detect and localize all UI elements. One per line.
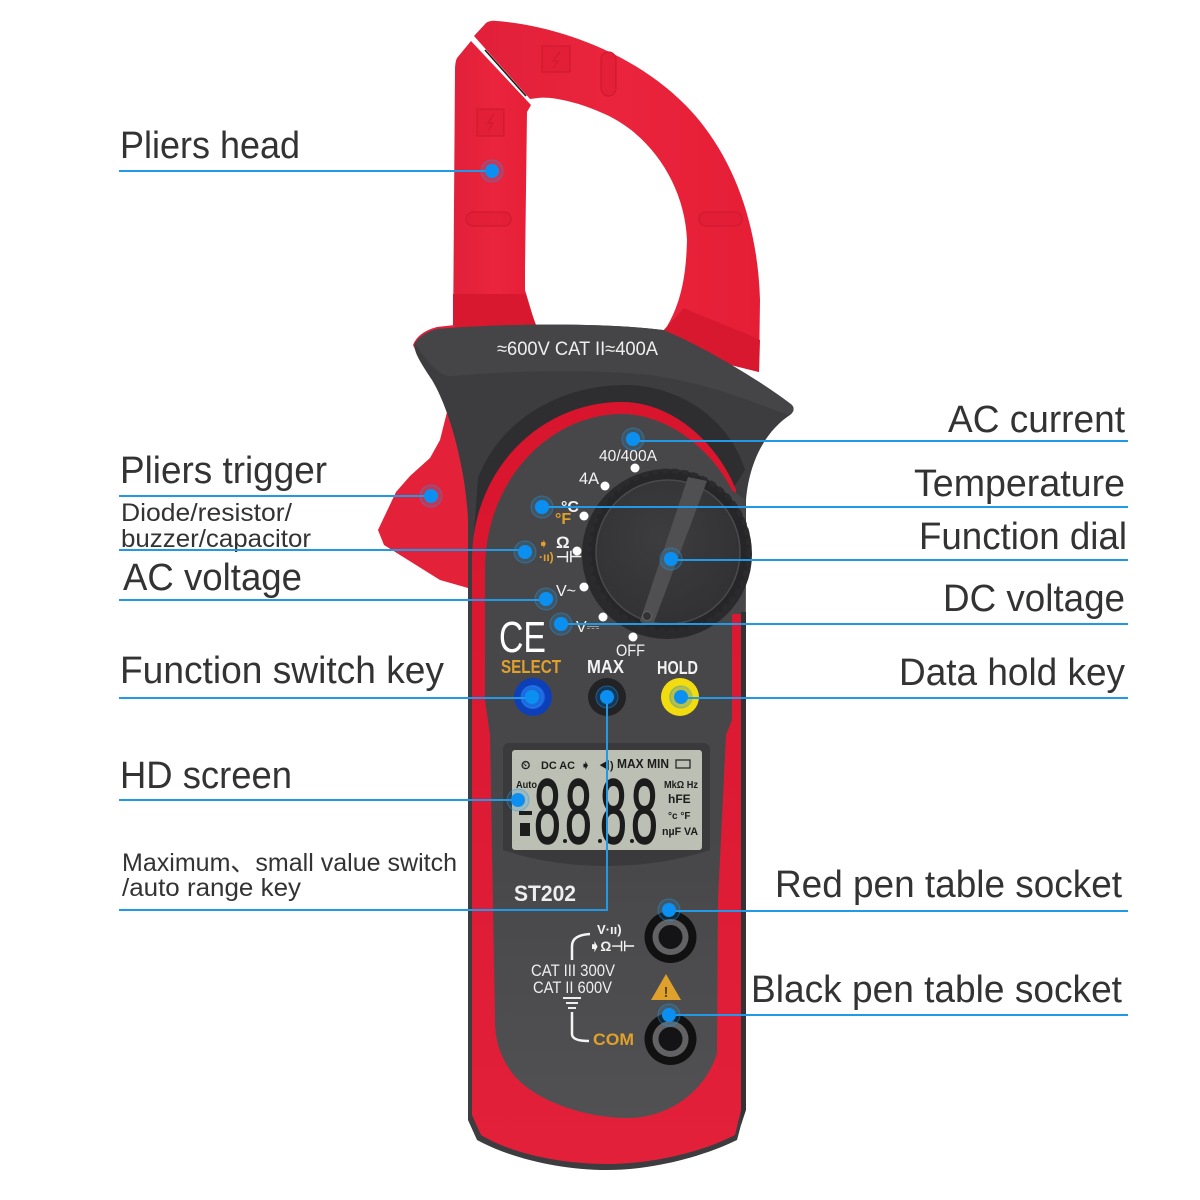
LCD units: MkΩ Hz bbox=[664, 780, 698, 791]
LCD minus sign bbox=[519, 811, 532, 815]
dial scale labels: OFF bbox=[616, 641, 645, 660]
pliers trigger bbox=[378, 408, 480, 588]
LCD units: °c °F bbox=[668, 811, 690, 822]
CE mark: CE bbox=[499, 613, 546, 662]
black pen socket bbox=[644, 1013, 696, 1065]
LCD decimal points bbox=[563, 839, 634, 843]
socket legend bbox=[531, 922, 635, 1049]
red sliver behind collar bbox=[413, 325, 455, 360]
rating text: ≈600V CAT II≈400A bbox=[497, 339, 658, 360]
right side dark edge bbox=[741, 612, 746, 1125]
hold button bbox=[661, 678, 699, 716]
dial pointer bbox=[640, 477, 707, 625]
dial scale labels: ➧ bbox=[538, 536, 549, 551]
callout: Diode/resistor/buzzer/capacitor: Diode/resistor/ bbox=[121, 499, 292, 527]
red frame bbox=[472, 402, 741, 1164]
LCD screen: MAX MIN bbox=[617, 756, 669, 771]
LCD digits: 8 bbox=[630, 763, 659, 872]
callout: Diode/resistor/buzzer/capacitor bbox=[119, 499, 536, 563]
LCD digits: 8 bbox=[564, 763, 593, 872]
jaw gap bbox=[485, 50, 526, 96]
callout: Pliers trigger: Pliers trigger bbox=[120, 450, 327, 492]
LCD bezel bbox=[503, 743, 710, 866]
callout: Pliers trigger bbox=[119, 450, 442, 507]
legend function symbols: ➧Ω⊣⊢ bbox=[589, 938, 635, 954]
max button bbox=[588, 678, 626, 716]
callout: AC voltage bbox=[119, 557, 557, 610]
callout: AC current: AC current bbox=[948, 399, 1125, 441]
callout: Temperature: Temperature bbox=[914, 463, 1125, 505]
callout: Diode/resistor/buzzer/capacitor: buzzer/capacitor bbox=[121, 525, 311, 553]
CAT III rating: CAT III 300V bbox=[531, 961, 616, 980]
jaw base shading right bbox=[650, 308, 760, 372]
dial scale labels: ·ıı) bbox=[539, 550, 554, 564]
callout: Pliers head bbox=[119, 125, 503, 182]
LCD screen: DC AC bbox=[541, 760, 575, 772]
dial scale labels: 40/400A bbox=[599, 448, 657, 465]
callout: Function dial bbox=[660, 516, 1128, 570]
dial scale labels: 4A bbox=[579, 469, 600, 488]
LCD status row: ⏲ bbox=[521, 758, 530, 772]
dial scale labels: Ω bbox=[556, 533, 570, 552]
battery icon bbox=[676, 760, 690, 768]
model name: ST202 bbox=[514, 881, 576, 906]
button labels bbox=[501, 657, 698, 678]
jaw base shading bbox=[453, 294, 540, 335]
callout: Black pen table socket: Black pen table socket bbox=[751, 969, 1122, 1011]
body outer shell bbox=[414, 325, 794, 1170]
LCD digits bbox=[533, 763, 659, 872]
pliers head: upper jaw bbox=[474, 21, 760, 372]
callout: HD screen: HD screen bbox=[120, 755, 292, 797]
callout: AC current bbox=[622, 399, 1128, 450]
LCD screen: ➧ bbox=[581, 760, 590, 772]
callout: Maximum, small value switch / auto range key: Maximum、small value switch bbox=[122, 849, 457, 877]
dial scale labels: V⎓ bbox=[576, 619, 600, 636]
clamp meter device bbox=[378, 21, 794, 1170]
callout: Temperature bbox=[531, 463, 1128, 518]
function dial bbox=[582, 469, 752, 639]
callout: Maximum, small value switch / auto range key: /auto range key bbox=[122, 874, 302, 902]
legend bracket bottom bbox=[572, 1012, 589, 1041]
callout: AC voltage: AC voltage bbox=[123, 557, 302, 599]
legend symbols: V·ıı) bbox=[597, 922, 622, 937]
pointer pivot bbox=[642, 612, 652, 620]
callout: Red pen table socket: Red pen table socket bbox=[775, 864, 1122, 906]
legend bracket top bbox=[572, 934, 590, 960]
callout: DC voltage bbox=[550, 578, 1128, 635]
dial knurl bbox=[589, 471, 749, 631]
dial face bbox=[596, 480, 740, 624]
callout: Function dial: Function dial bbox=[919, 516, 1127, 558]
select button bbox=[514, 678, 552, 716]
callout: Function switch key: Function switch key bbox=[120, 650, 444, 692]
LCD screen: ◀) bbox=[599, 759, 614, 772]
LCD screen bbox=[512, 750, 702, 872]
dial scale labels: °C bbox=[561, 499, 579, 516]
front panel bbox=[485, 414, 745, 1118]
callout: HD screen bbox=[119, 755, 529, 811]
button labels: SELECT bbox=[501, 657, 561, 677]
LCD digits: 8 bbox=[533, 763, 562, 872]
dark crescent above frame bbox=[472, 385, 745, 560]
warning triangle: ! bbox=[664, 984, 668, 1001]
dial scale labels: °F bbox=[555, 511, 571, 528]
callout: Red pen table socket bbox=[658, 864, 1128, 921]
callout: Black pen table socket bbox=[658, 969, 1128, 1026]
collar upper face bbox=[415, 325, 794, 415]
LCD units: nµF VA bbox=[662, 826, 698, 838]
warning triangle bbox=[651, 974, 681, 1001]
LCD units bbox=[662, 780, 698, 838]
ground symbol bbox=[563, 998, 581, 1008]
button labels: MAX bbox=[587, 657, 624, 677]
callout: Function switch key bbox=[119, 650, 543, 708]
dial shadow bbox=[582, 469, 752, 639]
callout: Data hold key bbox=[670, 652, 1128, 708]
callout: DC voltage: DC voltage bbox=[943, 578, 1125, 620]
callout: Pliers head: Pliers head bbox=[120, 125, 300, 167]
pliers head: left jaw bbox=[453, 41, 540, 340]
CAT II rating: CAT II 600V bbox=[533, 978, 613, 997]
jaw lightning marks bbox=[466, 46, 742, 226]
COM label: COM bbox=[593, 1030, 634, 1049]
dial scale labels bbox=[538, 448, 657, 660]
dial scale labels: ⊣⊢ bbox=[556, 549, 582, 566]
LCD units: hFE bbox=[668, 792, 691, 806]
LCD digits: 8 bbox=[599, 763, 628, 872]
dial scale labels: V~ bbox=[556, 583, 576, 600]
callout: Maximum, small value switch / auto range key bbox=[119, 686, 618, 910]
button labels: HOLD bbox=[657, 658, 698, 678]
range selector dots bbox=[572, 464, 640, 642]
red pen socket bbox=[644, 911, 696, 963]
LCD H mark bbox=[520, 823, 530, 836]
callout: Data hold key: Data hold key bbox=[899, 652, 1125, 694]
Auto label: Auto bbox=[516, 780, 537, 791]
